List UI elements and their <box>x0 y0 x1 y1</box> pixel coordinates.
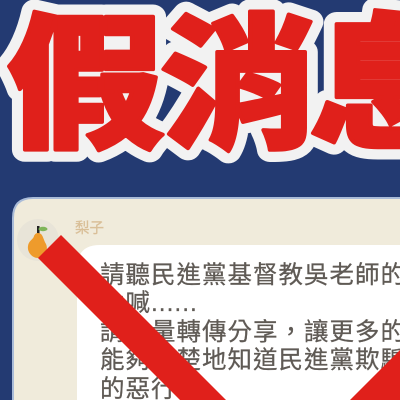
icon: pear avatar <box>17 219 59 261</box>
message text: 請聽民進黨基督教吳老師的 <box>100 261 400 289</box>
message text: 請盡量轉傳分享，讓更多的 <box>100 318 400 346</box>
title: 假 <box>7 5 165 168</box>
title: 假 <box>7 5 165 168</box>
panel: message card <box>13 198 400 400</box>
message bubble <box>77 245 400 400</box>
message text: 能夠清楚地知道民進黨欺騙 <box>100 346 400 374</box>
title <box>7 4 400 168</box>
message text <box>100 261 400 400</box>
title: 消 <box>161 4 315 167</box>
sender name: 梨子 <box>75 220 104 237</box>
title: 消 <box>161 4 315 167</box>
red X cross <box>38 235 400 400</box>
message text: 吶喊...... <box>100 289 198 317</box>
